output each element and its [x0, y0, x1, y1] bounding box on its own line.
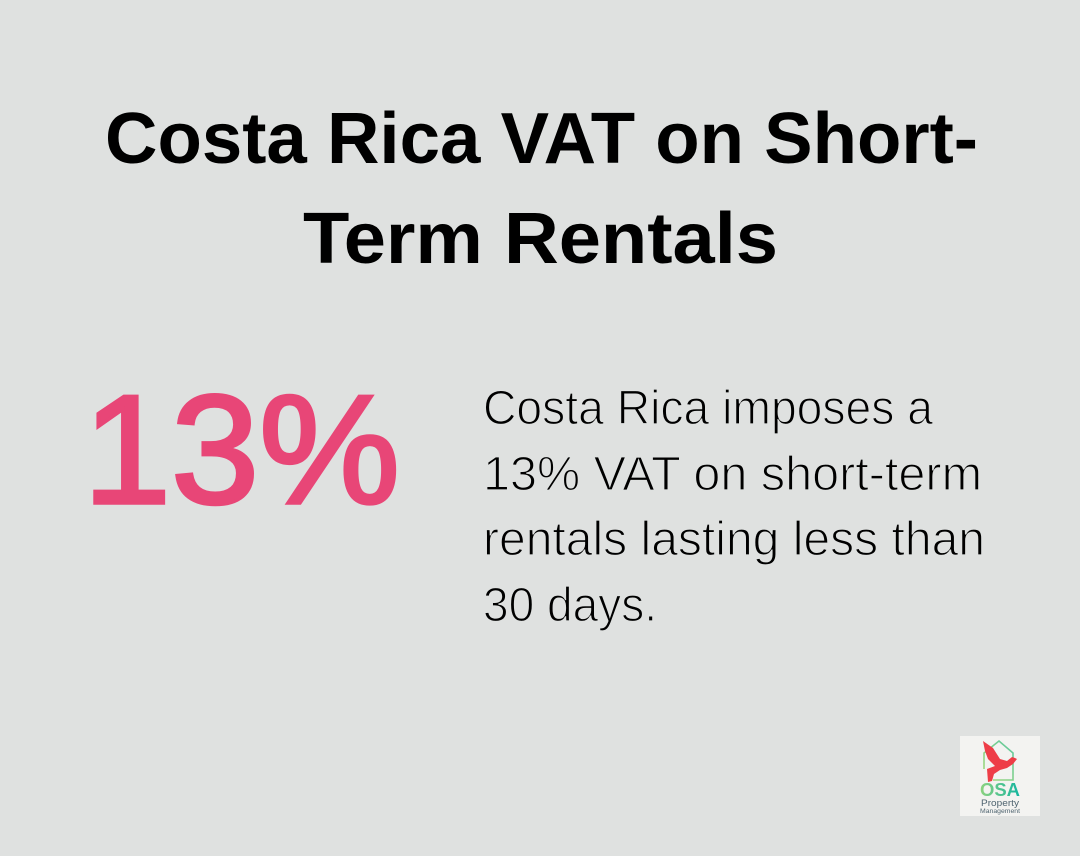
big statistic: 13%: 13% [83, 363, 400, 536]
description text: 30 days. [483, 579, 657, 632]
description text [483, 382, 985, 632]
logo: OSA Property Management: Property [981, 798, 1019, 809]
description text: 13% VAT on short-term [483, 448, 982, 501]
title: Term Rentals [303, 199, 778, 279]
title [105, 99, 978, 279]
description text: Costa Rica imposes a [483, 382, 933, 435]
description text: rentals lasting less than [483, 513, 985, 566]
icon: house outline [984, 741, 1013, 780]
logo wordmark: OSA [980, 780, 1020, 800]
logo: OSA Property Management: Management [980, 809, 1020, 815]
icon: red bird [983, 741, 1017, 782]
logo: OSA Property Management [960, 736, 1040, 816]
title: Costa Rica VAT on Short- [105, 99, 978, 179]
